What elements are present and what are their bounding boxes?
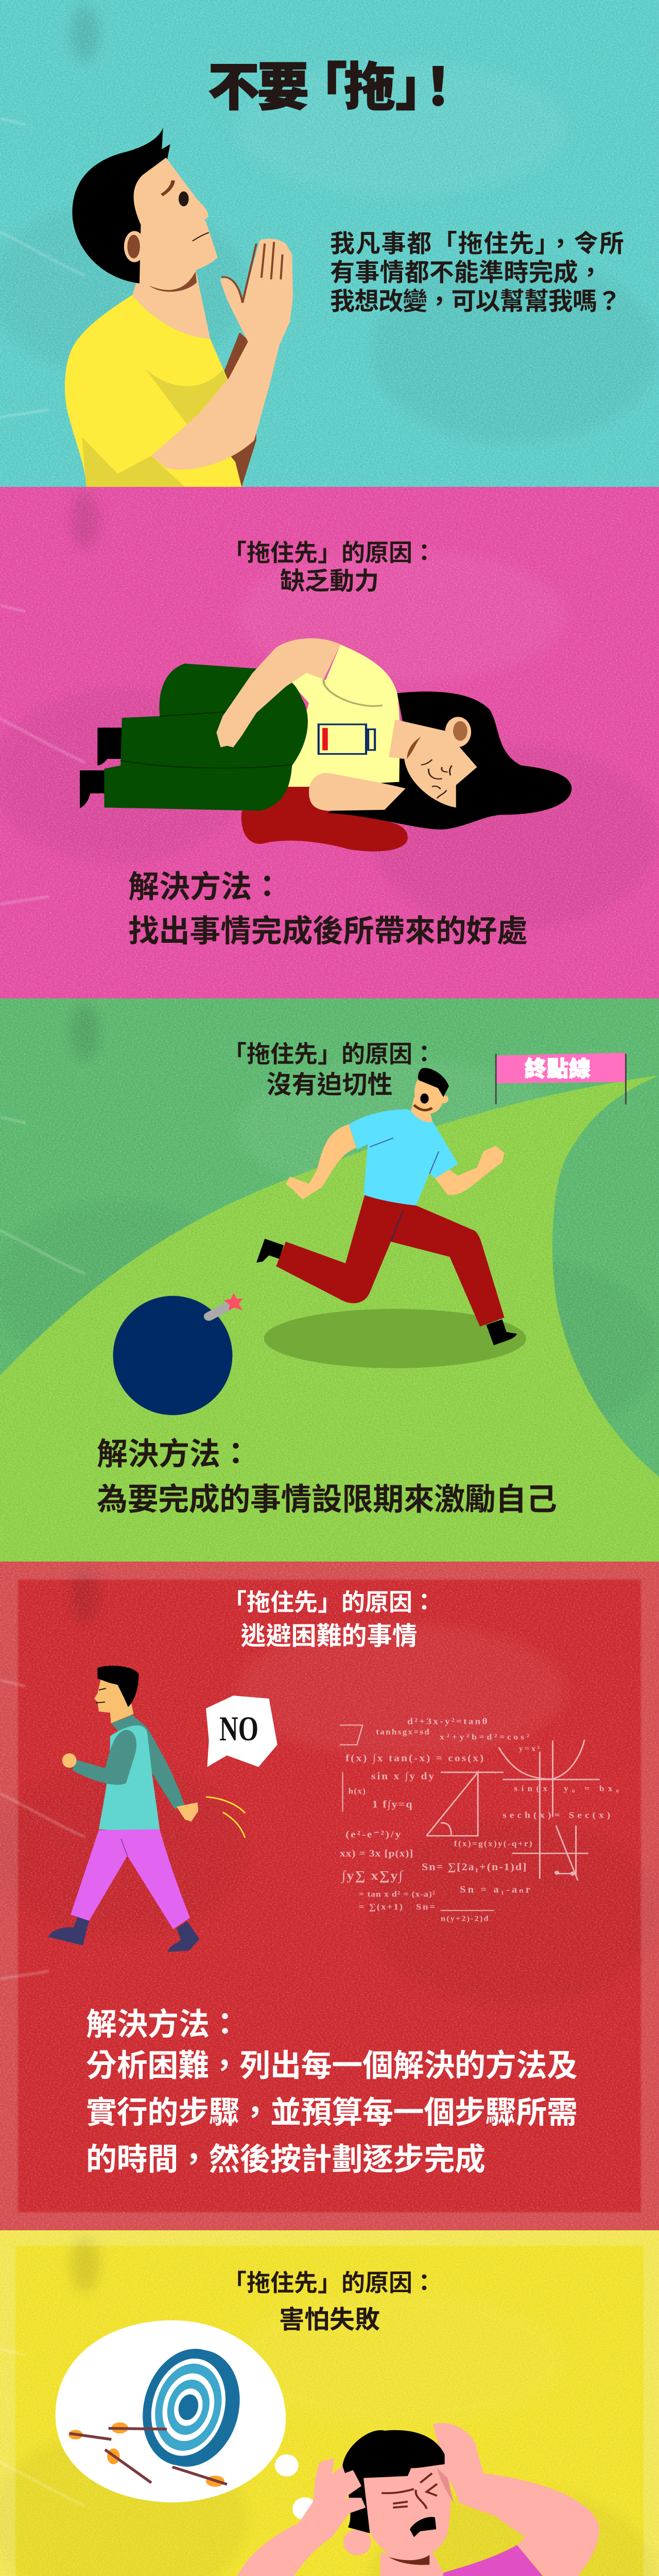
chart: chalk math formulas: f(x)=g(x)y(-q+r) (454, 1839, 532, 1848)
heading: cause: 「拖住先」的原因： (223, 2269, 436, 2296)
title: 「 (296, 59, 347, 116)
heading: cause: 害怕失敗 (279, 2306, 380, 2334)
text: intro question (330, 230, 624, 315)
illustration: praying man (65, 127, 293, 487)
heading: cause (223, 2269, 436, 2334)
title (208, 59, 464, 116)
chart: chalk math formulas: Sn = a₁-aₙr (460, 1884, 530, 1895)
panel: cause 4 fear of failure (0, 2230, 659, 2576)
chart: chalk math formulas: sin(x) y₀ = bx₀ (514, 1784, 619, 1793)
path: winding road (0, 1075, 659, 1562)
heading: cause (223, 539, 436, 595)
heading: cause: 「拖住先」的原因： (223, 539, 436, 566)
callout: NO speech bubble (206, 1696, 278, 1767)
text: solution: 解決方法： (97, 1437, 251, 1471)
text: solution (86, 2007, 578, 2177)
heading: cause: 逃避困難的事情 (240, 1622, 418, 1650)
text: intro question: 有事情都不能準時完成， (330, 259, 603, 286)
chart: chalk math formulas: n(y+2)-2)d (441, 1914, 489, 1923)
title: 」 (395, 59, 447, 116)
title: 拖 (344, 59, 395, 116)
chart: chalk math formulas: (e²-e⁻²)/y (345, 1829, 401, 1840)
chart: chalk math formulas: tanhsgx=sd (376, 1727, 429, 1736)
panel: cause 3 avoiding difficulty (0, 1562, 659, 2230)
illustration: running man (256, 1068, 526, 1368)
text: solution (128, 870, 528, 948)
chart: chalk math formulas (340, 1717, 619, 1923)
label: finish line: 終點線 (525, 1057, 591, 1081)
panel: cause 1 lack of motivation (0, 487, 659, 998)
chart: chalk math formulas: xx) = 3x [p(x)] (340, 1848, 413, 1859)
chart: chalk math formulas: 1 f∫y=q (372, 1798, 412, 1810)
chart: chalk math formulas: f(x) ∫x tan(-x) = cos(x) (345, 1753, 483, 1764)
text: solution: 為要完成的事情設限期來激勵自己 (97, 1482, 557, 1517)
callout: thought bubble with target and missed arrows (56, 2320, 317, 2520)
text: solution: 解決方法： (86, 2007, 240, 2042)
text: solution: 實行的步驟，並預算每一個步驟所需 (86, 2095, 578, 2130)
illustration: worried man holding head (230, 2423, 599, 2576)
heading: cause: 「拖住先」的原因： (223, 1041, 436, 1067)
chart: chalk math formulas: = ∑(x+1) (359, 1902, 403, 1911)
title: 不要 (208, 59, 309, 116)
chart: chalk math formulas: = tan x d² = (x-a)² (359, 1889, 435, 1899)
panel: cause 2 no urgency (0, 998, 659, 1562)
text: solution: 解決方法： (128, 870, 283, 904)
chart: chalk math formulas: Sn= (416, 1902, 435, 1911)
heading: cause (223, 1041, 436, 1099)
chart: chalk math formulas: Sn= ∑[2a₁+(n-1)d] (422, 1861, 527, 1873)
icon: bomb (113, 1293, 243, 1415)
illustration: finish line banner (496, 1053, 626, 1104)
heading: cause: 缺乏動力 (280, 568, 379, 595)
text: intro question: 我凡事都「拖住先」，令所 (330, 230, 624, 258)
text: intro question: 我想改變，可以幫幫我嗎？ (330, 288, 621, 315)
title: ！ (412, 59, 464, 116)
chart: chalk math formulas: sech(x)= Sec(x) (502, 1810, 610, 1820)
panel: intro (0, 0, 659, 487)
chart: chalk math formulas: sin x ∫y dy (371, 1771, 434, 1782)
text: solution: 的時間，然後按計劃逐步完成 (86, 2142, 485, 2177)
heading: cause (223, 1589, 436, 1650)
heading: cause: 「拖住先」的原因： (223, 1589, 436, 1616)
illustration: man walking away (48, 1666, 245, 1952)
text: solution: 找出事情完成後所帶來的好處 (128, 914, 528, 948)
text: solution (97, 1437, 557, 1517)
heading: cause: 沒有迫切性 (266, 1071, 393, 1099)
chart: chalk math formulas: d²+3x-y²=tanθ (407, 1717, 488, 1726)
chart: chalk math formulas: h(x) (349, 1787, 366, 1795)
chart: chalk math formulas: ∫y∑ x∑y∫ (341, 1868, 404, 1884)
illustration: tired woman lying down (80, 638, 571, 852)
callout: NO speech bubble: NO (219, 1709, 258, 1748)
chart: chalk math formulas: y=x² (519, 1744, 540, 1753)
chart: chalk math formulas: x²+y²b=d²=cos² (440, 1732, 529, 1741)
text: solution: 分析困難，列出每一個解決的方法及 (86, 2048, 578, 2083)
